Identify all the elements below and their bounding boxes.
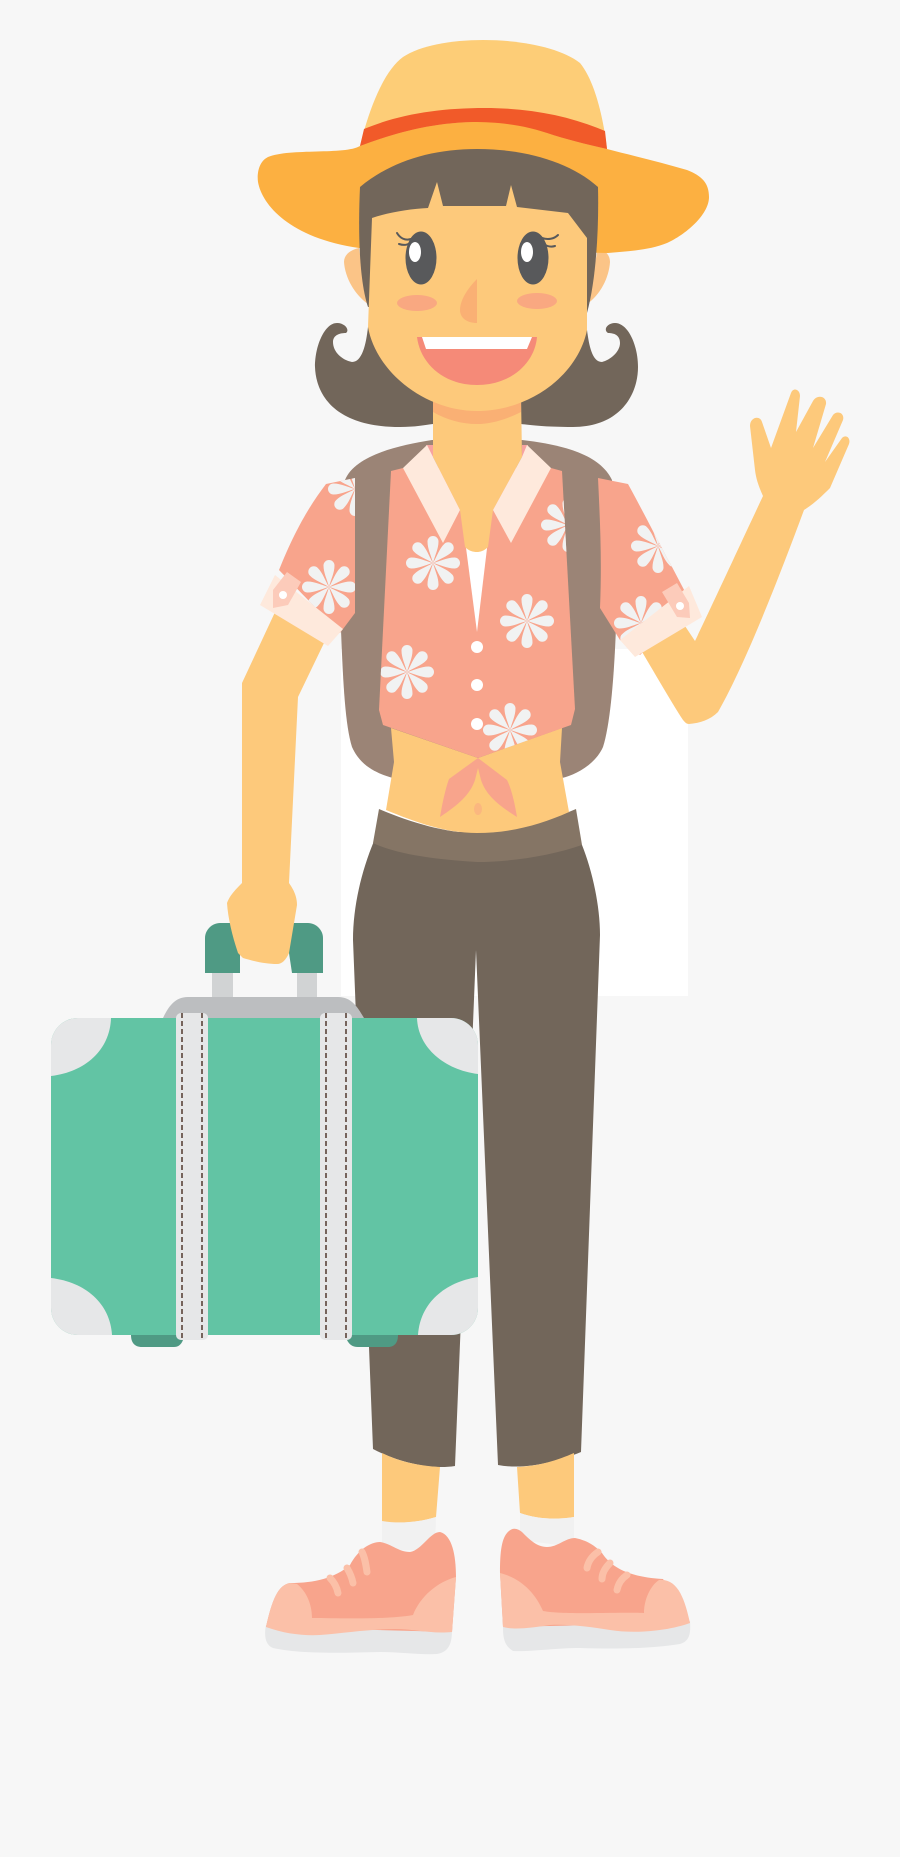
teeth (422, 337, 532, 349)
left sleeve band (260, 575, 343, 646)
left sleeve flowers (302, 478, 355, 614)
hat crown (360, 40, 607, 149)
right sleeve flowers (614, 525, 672, 640)
top right corner (417, 1018, 478, 1074)
shirt flowers (380, 500, 566, 751)
hat band (360, 108, 607, 149)
right collar (493, 445, 551, 543)
right arm and waving hand (635, 389, 849, 724)
right leg (517, 1453, 574, 1519)
bottom left corner (51, 1278, 112, 1335)
nose (460, 279, 477, 323)
white v undershirt (465, 540, 488, 632)
right shoe upper (500, 1529, 690, 1627)
right shoe (500, 1529, 690, 1651)
shirt knot (440, 758, 517, 817)
shirt lining behind collar (426, 445, 528, 458)
left shoe sole (265, 1625, 452, 1654)
left shoe upper (266, 1532, 456, 1632)
left ear (344, 248, 368, 304)
suitcase handle grip right (285, 923, 323, 973)
right shoe laces (587, 1552, 627, 1590)
right shoe sole (503, 1621, 690, 1651)
right sleeve band (620, 586, 702, 657)
backpack (341, 440, 616, 778)
suitcase handle posts (212, 973, 317, 999)
left sleeve (260, 478, 355, 646)
left collar (403, 445, 460, 543)
right eye (518, 232, 548, 284)
right tab button (676, 602, 684, 610)
suitcase top rim (163, 997, 364, 1018)
waistband (373, 809, 582, 862)
right eye highlight (521, 242, 533, 262)
left shoe laces (330, 1552, 367, 1593)
left shoe (265, 1532, 456, 1654)
right sock (520, 1513, 574, 1547)
right eyelashes (542, 235, 558, 247)
left sleeve tab (273, 572, 301, 608)
left foot (131, 1335, 183, 1347)
left shoe toe and heel (266, 1577, 456, 1635)
tummy (386, 728, 569, 833)
face (368, 182, 587, 411)
neck shadow (433, 400, 521, 424)
left cheek (397, 295, 437, 311)
buttons (471, 641, 483, 730)
mouth (417, 337, 537, 385)
right cheek (517, 293, 557, 309)
right sleeve tab (662, 583, 690, 618)
left eye (406, 232, 436, 284)
left eyelashes (397, 233, 411, 245)
right ear (587, 248, 610, 304)
left leg (382, 1453, 440, 1523)
left sock (382, 1517, 436, 1550)
suitcase handle grip left (205, 923, 240, 973)
bottom right corner (418, 1277, 478, 1335)
right shoe toe and heel (500, 1573, 690, 1632)
hair (359, 149, 598, 313)
hat brim (258, 121, 709, 253)
right strap (320, 1013, 352, 1340)
trousers (353, 830, 600, 1467)
left arm and hand (227, 610, 324, 964)
shirt torso (379, 468, 595, 758)
navel (474, 803, 482, 815)
suitcase body (51, 1018, 478, 1335)
top left corner (51, 1018, 111, 1076)
illustration: tourist with suitcase (51, 40, 850, 1654)
right sleeve (598, 478, 702, 657)
left strap (176, 1013, 208, 1340)
left tab button (279, 591, 287, 599)
suitcase (51, 973, 478, 1347)
white backdrop panel (341, 649, 688, 996)
left eye highlight (409, 242, 421, 262)
neck and chest (433, 395, 522, 552)
right foot (347, 1335, 398, 1347)
hair back curls (315, 323, 638, 427)
